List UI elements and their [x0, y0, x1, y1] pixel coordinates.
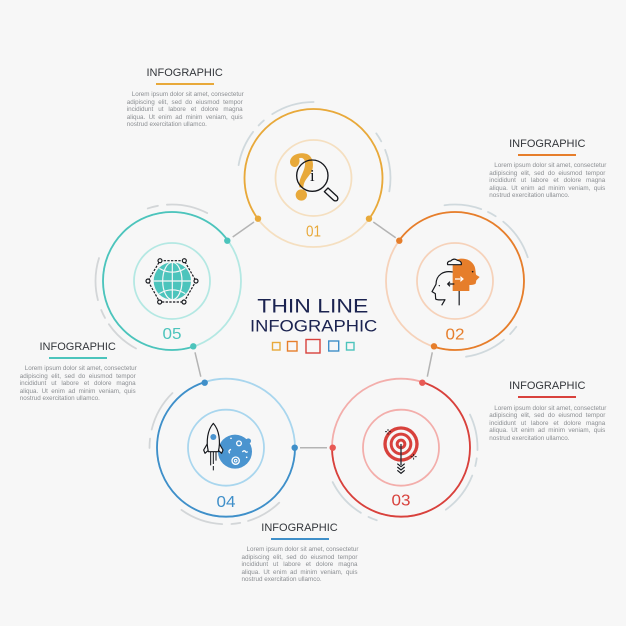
- text block: infographic lower right: aliqua. Ut enim ad minim veniam, quis: [489, 427, 605, 434]
- decorative outer dashed arcs 05: [96, 204, 248, 358]
- number 05: 05: [162, 326, 182, 343]
- text block: infographic left: incididunt ut labore et dolore magna: [20, 380, 136, 387]
- connectors between circles: [195, 222, 432, 448]
- icon: target and arrow: [383, 426, 419, 473]
- icon: rocket and planet: [204, 423, 252, 470]
- text block: infographic top left: [127, 66, 244, 128]
- text block: infographic left: adipiscing elit, sed do eiusmod tempor: [20, 373, 136, 380]
- text block: infographic left: aliqua. Ut enim ad minim veniam, quis: [20, 388, 136, 395]
- text block: infographic top right: nostrud exercitation ullamco.: [489, 192, 569, 199]
- icon: question mark and magnifier: [290, 153, 338, 201]
- number 02: 02: [446, 327, 464, 344]
- text block: infographic bottom center: adipiscing elit, sed do eiusmod tempor: [242, 554, 358, 561]
- text block: infographic lower right: nostrud exercitation ullamco.: [489, 434, 569, 442]
- outer ring 05: [103, 212, 241, 350]
- inner ring 01: [276, 140, 352, 216]
- number 04: 04: [216, 494, 236, 511]
- text block: infographic lower right: [489, 380, 606, 442]
- text block: infographic lower right: INFOGRAPHIC: [509, 380, 586, 392]
- panel: step 01 circle: [236, 101, 390, 255]
- text block: infographic bottom center: nostrud exercitation ullamco.: [242, 576, 322, 583]
- text block: infographic top right: aliqua. Ut enim ad minim veniam, quis: [489, 185, 605, 192]
- text block: infographic left: INFOGRAPHIC: [39, 340, 116, 352]
- panel: step 03 circle: [324, 371, 478, 524]
- text block: infographic top right: incididunt ut labore et dolore magna: [489, 177, 605, 184]
- text block: infographic left: nostrud exercitation ullamco.: [20, 395, 100, 402]
- colored squares row: [272, 340, 354, 353]
- inner ring 02: [417, 243, 493, 319]
- text block: infographic lower right: adipiscing elit, sed do eiusmod tempor: [489, 412, 605, 419]
- text block: infographic bottom center: INFOGRAPHIC: [261, 522, 338, 534]
- inner ring 03: [363, 410, 439, 486]
- number 03: 03: [392, 493, 410, 510]
- decorative outer dashed arcs 03: [324, 371, 478, 524]
- outer ring 02: [386, 212, 524, 350]
- text block: infographic lower right: Lorem ipsum dolor sit amet, consectetur: [494, 405, 606, 412]
- outer ring 03: [330, 379, 470, 517]
- icon: two heads: [432, 259, 480, 305]
- icon: globe network: [146, 259, 198, 304]
- panel: step 05 circle: [96, 204, 248, 358]
- text block: infographic left: [20, 340, 137, 402]
- text block: infographic lower right: incididunt ut labore et dolore magna: [489, 420, 605, 427]
- text block: infographic top left: aliqua. Ut enim ad minim veniam, quis: [127, 114, 243, 121]
- title: INFOGRAPHIC: [250, 318, 378, 336]
- text block: infographic top right: INFOGRAPHIC: [509, 138, 586, 150]
- text block: infographic top left: nostrud exercitation ullamco.: [127, 121, 207, 128]
- text block: infographic top left: INFOGRAPHIC: [146, 66, 223, 78]
- text block: infographic bottom center: Lorem ipsum dolor sit amet, consectetur: [246, 546, 358, 553]
- text block: infographic top right: Lorem ipsum dolor sit amet, consectetur: [494, 162, 606, 169]
- text block: infographic top right: [489, 138, 606, 199]
- text block: infographic bottom center: incididunt ut labore et dolore magna: [242, 561, 358, 568]
- inner ring 04: [188, 410, 264, 486]
- icon: question mark and magnifier: i: [310, 166, 315, 185]
- panel: step 04 circle: [150, 371, 302, 524]
- decorative outer dashed arcs 04: [150, 371, 302, 524]
- inner ring 05: [134, 243, 210, 319]
- panel: step 02 circle: [378, 204, 532, 358]
- decorative outer dashed arcs 02: [378, 204, 532, 358]
- outer ring 01: [244, 109, 382, 247]
- title: [250, 295, 378, 336]
- title: THIN LINE: [257, 295, 368, 317]
- text block: infographic top left: Lorem ipsum dolor sit amet, consectetur: [132, 91, 244, 98]
- text block: infographic top left: incididunt ut labore et dolore magna: [127, 106, 243, 113]
- number 01: 01: [306, 224, 321, 241]
- text block: infographic top right: adipiscing elit, sed do eiusmod tempor: [489, 170, 605, 177]
- text block: infographic top left: adipiscing elit, sed do eiusmod tempor: [127, 99, 243, 106]
- decorative outer dashed arcs 01: [236, 101, 390, 255]
- outer ring 04: [157, 379, 298, 517]
- text block: infographic bottom center: aliqua. Ut enim ad minim veniam, quis: [242, 569, 358, 576]
- text block: infographic left: Lorem ipsum dolor sit amet, consectetur: [25, 365, 137, 372]
- text block: infographic bottom center: [242, 522, 358, 583]
